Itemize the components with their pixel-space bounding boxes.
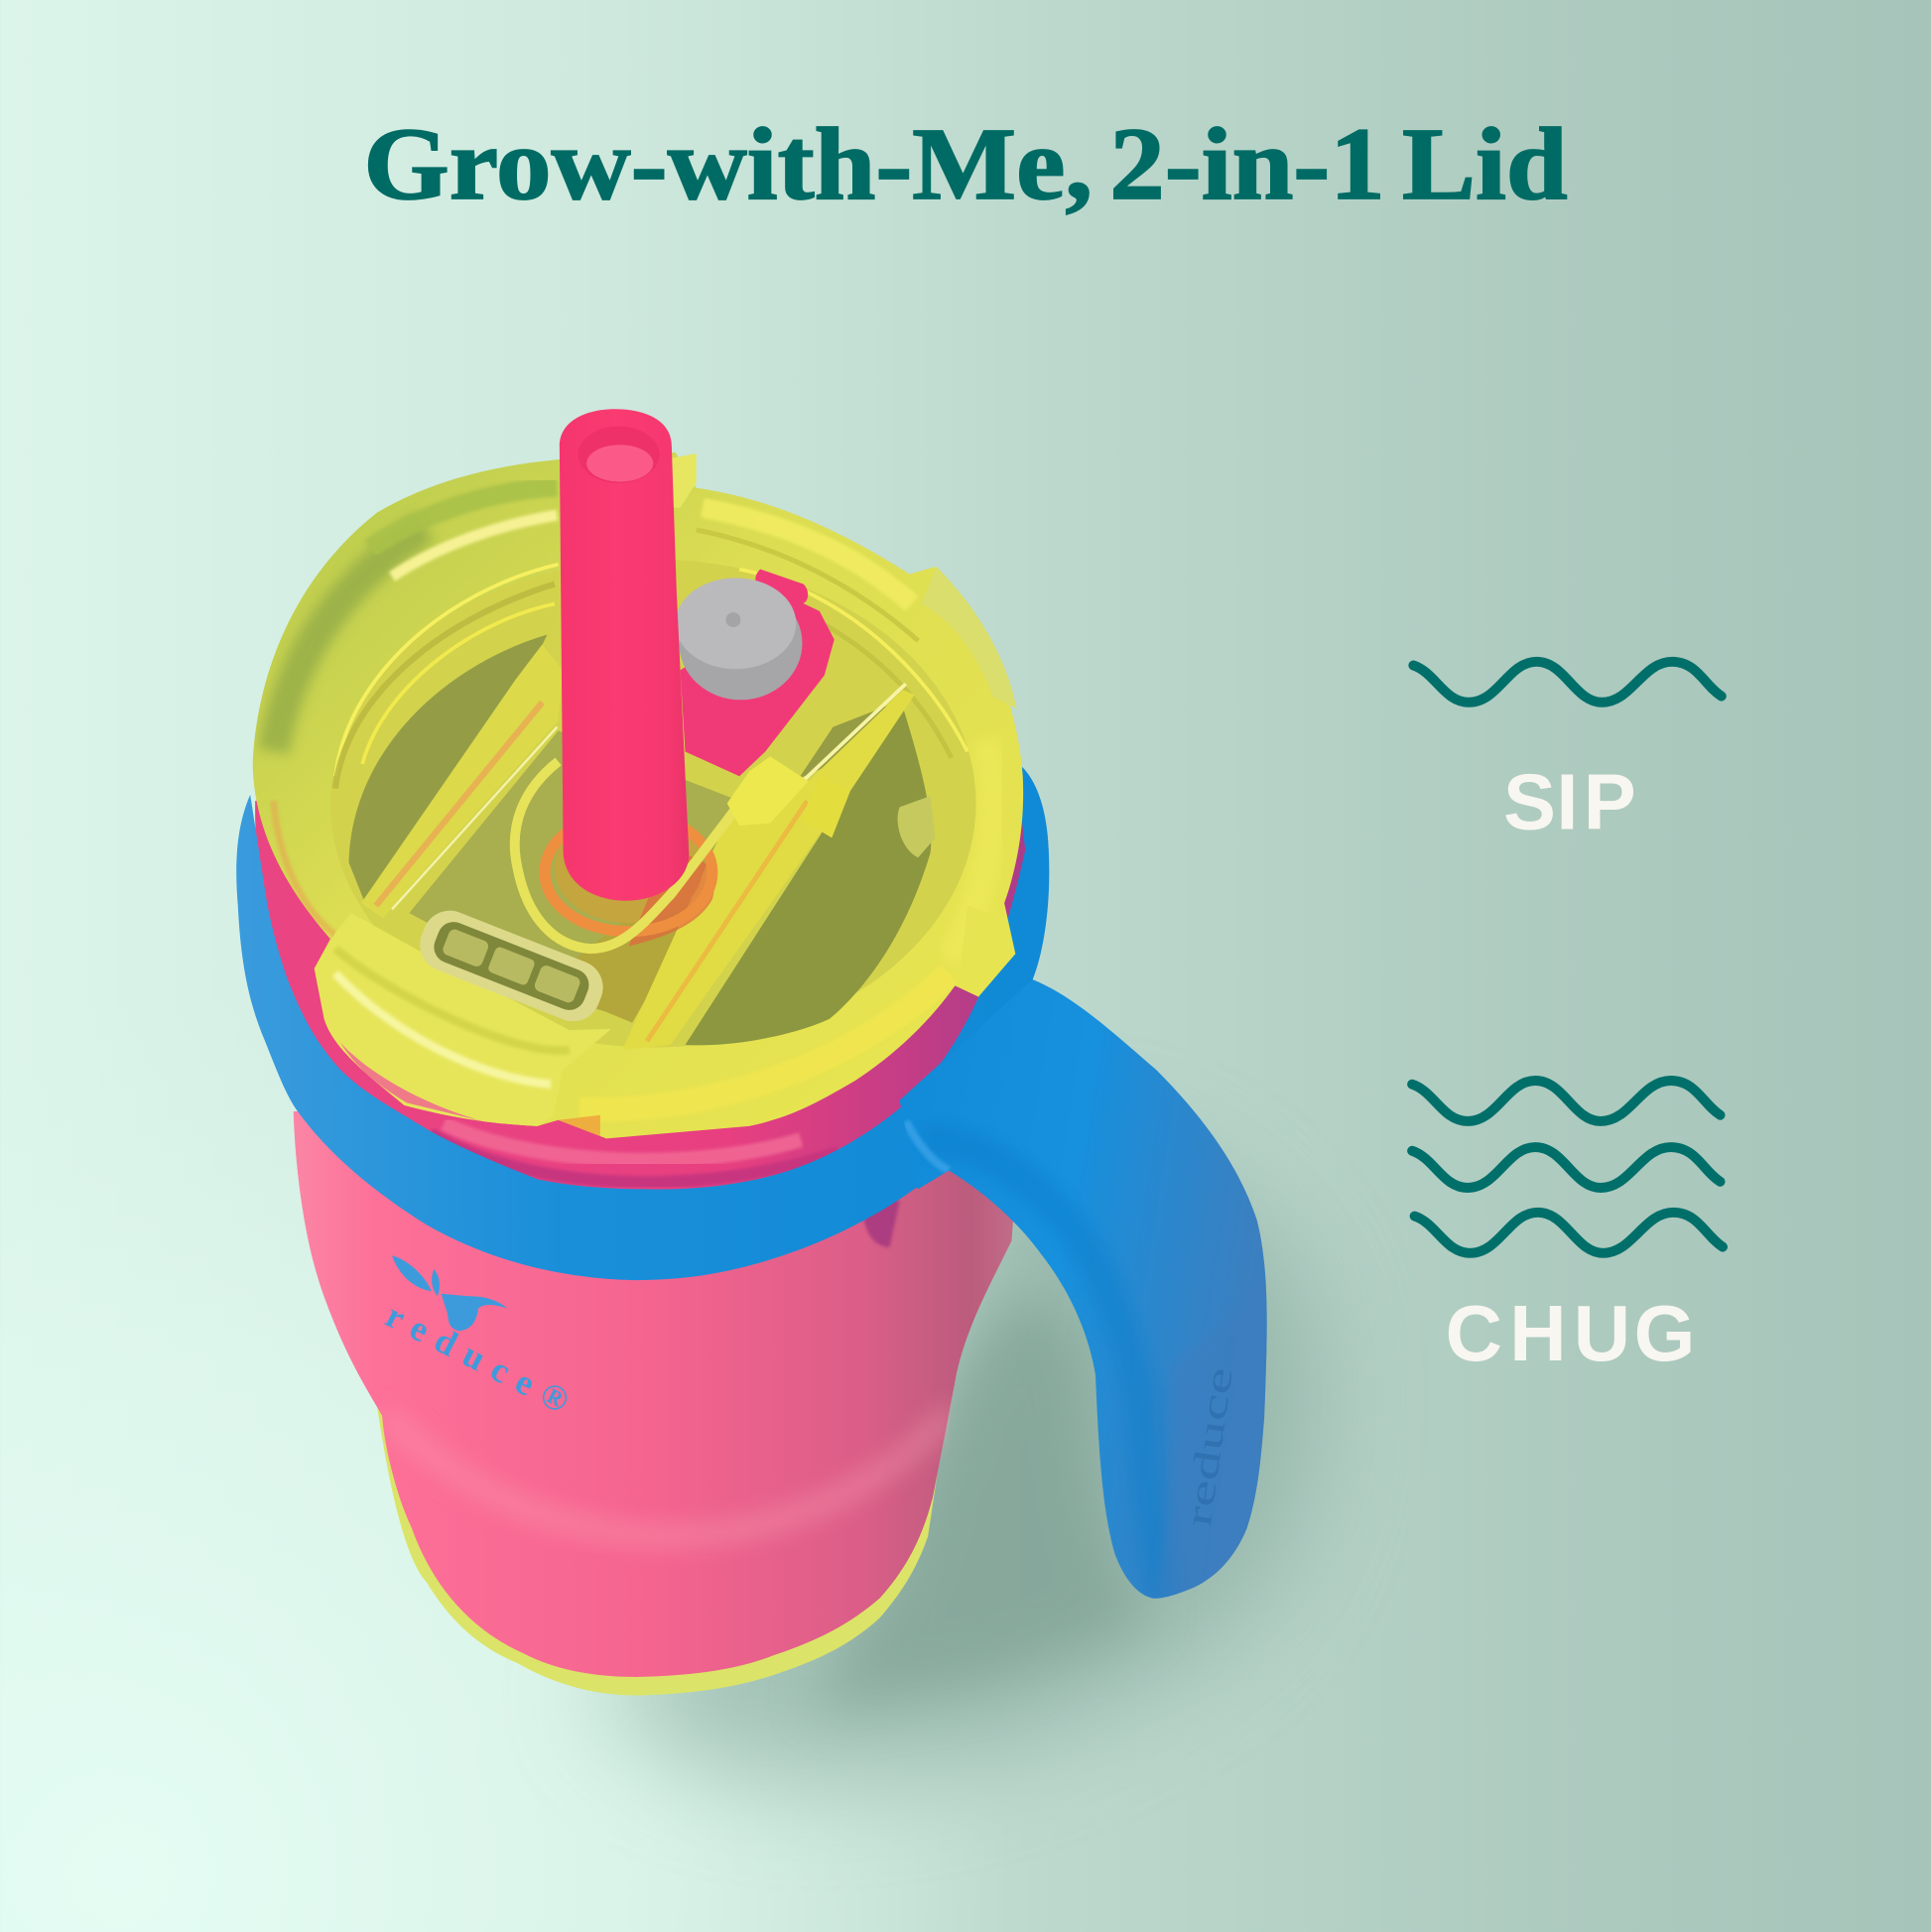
cast shadow of cup (591, 1139, 1318, 1779)
olive floor, centre panel (409, 730, 739, 1019)
olive patch above the right rail (799, 705, 890, 779)
label: chug: H (1509, 1289, 1567, 1377)
pink neck ring (255, 690, 1038, 1214)
logo on cup: reduce® (380, 1295, 576, 1421)
cup illustration (236, 409, 1281, 1696)
label: sip: P (1584, 758, 1636, 846)
blue silicone collar (236, 761, 1049, 1280)
olive floor, right (686, 708, 931, 1045)
pink valve holder (681, 570, 835, 776)
title: Grow-with-Me, 2-in-1 Lid (363, 106, 1568, 221)
front pull tab (315, 913, 611, 1126)
small vent pill (898, 796, 936, 857)
lid outer shell (253, 452, 1023, 1138)
straw mouth opening (515, 761, 749, 949)
right rail (622, 690, 914, 1050)
label: chug: G (1634, 1289, 1695, 1377)
straw base rings (555, 815, 703, 923)
top right tab (922, 567, 1017, 708)
lid (253, 409, 1023, 1138)
sip icon and label (1413, 662, 1722, 846)
straw (560, 409, 689, 901)
label: chug: U (1574, 1289, 1630, 1377)
label: sip: I (1556, 758, 1578, 846)
chug vent (412, 903, 611, 1029)
olive floor, left (349, 634, 547, 899)
left rail (361, 644, 564, 918)
right rail clip over pink holder (727, 756, 809, 826)
icon: triple wave (1412, 1081, 1723, 1253)
label: chug: C (1446, 1289, 1502, 1377)
debossed mark on handle: reduce (1179, 1364, 1241, 1529)
cup body (291, 1085, 1023, 1677)
cup base: yellow rim (370, 1355, 955, 1696)
icon: single wave (1413, 662, 1722, 703)
inner well (330, 560, 976, 1047)
handle (899, 979, 1267, 1599)
small straw-side tab (671, 453, 697, 508)
rim shading (274, 486, 993, 1138)
right hinge tab (960, 906, 1015, 997)
grey vent plug (676, 578, 802, 700)
label: sip: S (1503, 758, 1556, 846)
chug icon and label (1412, 1081, 1723, 1377)
